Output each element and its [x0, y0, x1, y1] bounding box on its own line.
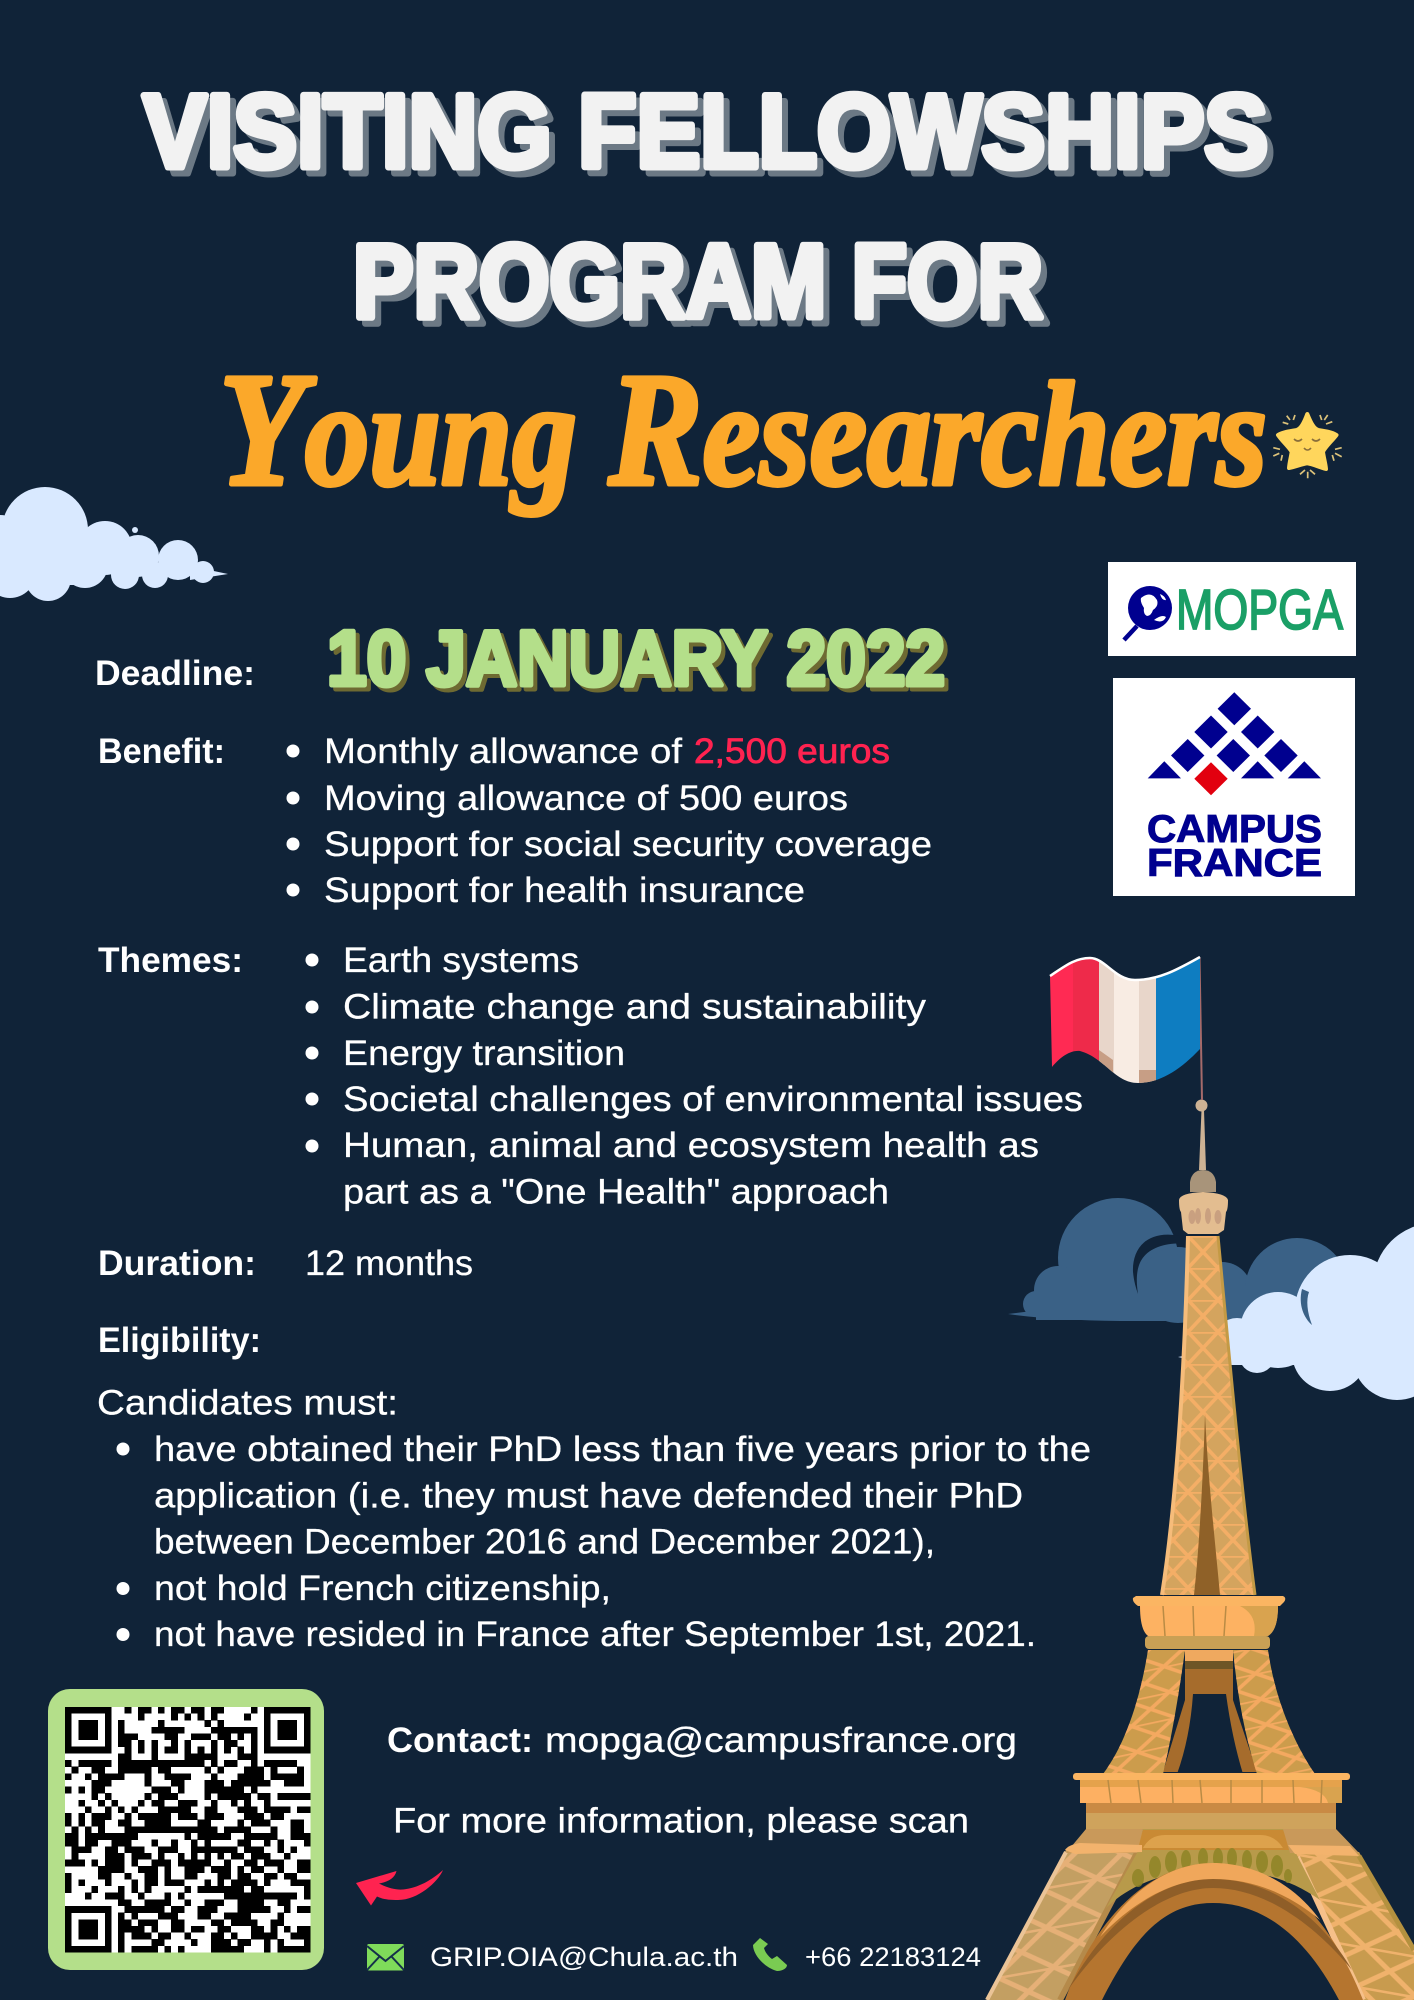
main arch — [1065, 1863, 1363, 2000]
flag pole — [1200, 957, 1202, 1100]
upper tower slit — [1194, 1414, 1220, 1595]
icon: diamonds — [1148, 692, 1321, 795]
lower legs — [987, 1850, 1414, 2000]
eligibility list: between December 2016 and December 2021), — [154, 1522, 935, 1562]
logo: MOPGA — [1108, 562, 1356, 656]
title — [143, 74, 1268, 520]
eligibility list — [154, 1430, 1091, 1654]
benefit list: 2,500 euros — [694, 732, 890, 771]
icon: magnifier globe — [1124, 586, 1172, 640]
themes list: part as a "One Health" approach — [343, 1172, 889, 1212]
benefit list: Support for social security coverage — [324, 825, 932, 864]
spandrel — [1106, 1828, 1320, 1908]
eligibility list: not hold French citizenship, — [154, 1569, 611, 1608]
eligibility list: application (i.e. they must have defended their PhD — [154, 1476, 1023, 1516]
eligibility section — [97, 1321, 1091, 1654]
footer contacts — [367, 1938, 981, 1972]
arrow — [356, 1870, 443, 1906]
scan instruction: For more information, please scan — [393, 1802, 969, 1840]
icon: french flag — [1050, 950, 1202, 1100]
MOPGA wordmark: MOPGA — [1176, 578, 1343, 642]
eligibility label: Eligibility: — [98, 1321, 261, 1360]
themes bullets — [306, 954, 318, 1152]
duration section — [98, 1244, 473, 1283]
title line 2: PROGRAM FOR — [353, 224, 1043, 340]
eligibility intro: Candidates must: — [97, 1384, 398, 1422]
benefit bullets — [286, 744, 300, 896]
logo: Campus France: FRANCE — [1147, 842, 1322, 885]
duration section: Duration: — [98, 1244, 256, 1283]
second level arch — [1163, 1650, 1257, 1772]
first platform — [1065, 1773, 1359, 1856]
title script line: Young Researchers — [219, 341, 1267, 520]
benefit list: Support for health insurance — [324, 871, 805, 910]
eligibility list: not have resided in France after September 1st, 2021. — [154, 1615, 1036, 1654]
contact line — [387, 1721, 1017, 1760]
second level legs — [1103, 1650, 1185, 1774]
title line 1: VISITING FELLOWSHIPS — [143, 74, 1268, 190]
duration section: 12 months — [305, 1244, 473, 1283]
eligibility bullets — [116, 1442, 130, 1641]
themes list: Human, animal and ecosystem health as — [343, 1126, 1039, 1165]
Campus France wordmark: CAMPUS — [1147, 808, 1322, 851]
deadline date: 10 JANUARY 2022 — [327, 614, 945, 702]
qr code panel — [48, 1689, 324, 1970]
deadline label: Deadline: — [95, 654, 255, 693]
themes list: Climate change and sustainability — [343, 988, 927, 1026]
themes label: Themes: — [98, 941, 243, 980]
upper tower — [1162, 1236, 1255, 1595]
cloud: light blue right — [1178, 1223, 1414, 1400]
dome — [1190, 1170, 1216, 1192]
top cabin — [1179, 1192, 1228, 1234]
themes section — [98, 941, 1083, 1212]
second platform — [1133, 1596, 1285, 1649]
logo: Campus France — [1113, 678, 1355, 896]
icon: envelope — [367, 1944, 404, 1970]
benefit section — [98, 732, 932, 910]
benefit list: Monthly allowance of — [324, 732, 682, 771]
eligibility list: have obtained their PhD less than five years prior to the — [154, 1430, 1091, 1469]
icon: phone — [753, 1938, 787, 1971]
cloud: dark blue — [1008, 1198, 1349, 1342]
benefit list — [324, 732, 932, 910]
cloud: top left — [0, 487, 228, 601]
icon: star — [1273, 414, 1342, 478]
qr code — [65, 1710, 310, 1949]
footer phone: +66 22183124 — [805, 1942, 981, 1972]
spire — [1199, 1110, 1206, 1170]
themes list — [343, 941, 1083, 1212]
benefit label: Benefit: — [98, 732, 225, 771]
themes list: Earth systems — [343, 941, 579, 980]
benefit list: Moving allowance of 500 euros — [324, 779, 848, 818]
contact line: mopga@campusfrance.org — [545, 1721, 1017, 1760]
eiffel tower — [987, 1100, 1414, 2000]
themes list: Societal challenges of environmental issues — [343, 1080, 1083, 1119]
footer email: GRIP.OIA@Chula.ac.th — [430, 1942, 738, 1972]
themes list: Energy transition — [343, 1034, 625, 1073]
flag cloth — [1050, 958, 1200, 1083]
contact line: Contact: — [387, 1721, 533, 1760]
